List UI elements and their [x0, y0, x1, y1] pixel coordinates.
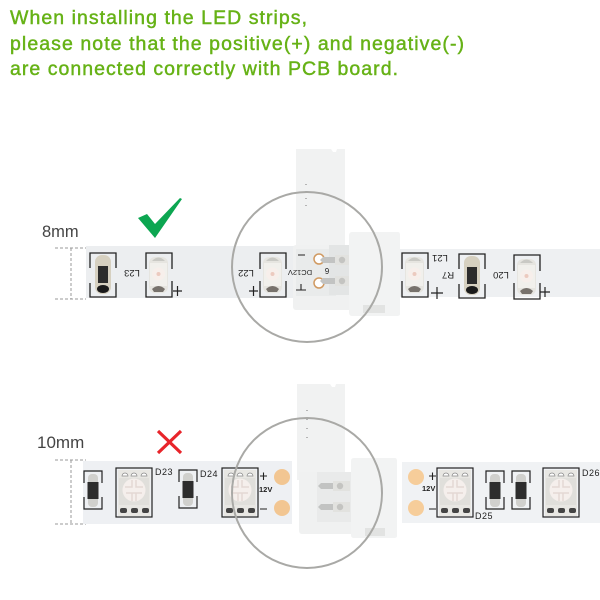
- dimension: 10mm: 10mm: [37, 433, 84, 452]
- strip components right: L21: [432, 252, 448, 263]
- connector: contacts: [317, 472, 351, 522]
- connector: top arm: [297, 384, 345, 480]
- strip components left: [84, 467, 290, 517]
- strip components left: D23: [155, 467, 173, 477]
- magnifier circle 2: [232, 418, 382, 568]
- panel: correct 8mm strip: [42, 149, 600, 342]
- dimension: 8mm: [42, 223, 86, 299]
- strip components left: 12V: [259, 485, 272, 494]
- strip end inside connector: 6: [324, 266, 329, 275]
- title: are connected correctly with PCB board.: [10, 58, 398, 80]
- connector: clamp: [349, 232, 400, 316]
- title: please note that the positive(+) and negative(-): [10, 33, 464, 55]
- panel: incorrect 10mm strip: [37, 384, 600, 568]
- icon: green check mark: [138, 198, 182, 238]
- LED strip right section: [400, 249, 600, 297]
- strip components right: [408, 468, 600, 521]
- strip end inside connector: DC12V: [288, 268, 312, 277]
- strip components right: 12V: [422, 484, 435, 493]
- connector: clamp: [351, 458, 397, 538]
- LED strip left section: [86, 246, 306, 298]
- strip components right: D25: [475, 511, 493, 521]
- strip components right: R7: [442, 269, 454, 280]
- strip components left: D24: [200, 469, 218, 479]
- title: When installing the LED strips,: [10, 7, 307, 29]
- strip components right: [402, 252, 550, 299]
- strip components left: [90, 253, 286, 297]
- icon: red cross: [158, 431, 181, 453]
- strip components left: L23: [124, 267, 140, 278]
- dimension: 10mm: [37, 433, 86, 524]
- dimension: 8mm: 8mm: [42, 223, 79, 241]
- connector: top arm: [296, 149, 345, 250]
- strip components right: D26: [582, 468, 600, 478]
- strip components right: L20: [493, 269, 509, 280]
- connector: base plate: [293, 245, 353, 310]
- LED strip left section: [83, 461, 292, 524]
- magnifier circle 1: [232, 192, 382, 342]
- LED strip right section: [402, 462, 600, 523]
- strip end inside connector: [288, 245, 352, 296]
- connector: base plate: [299, 472, 352, 534]
- strip components left: L22: [238, 267, 254, 278]
- title: [10, 7, 464, 80]
